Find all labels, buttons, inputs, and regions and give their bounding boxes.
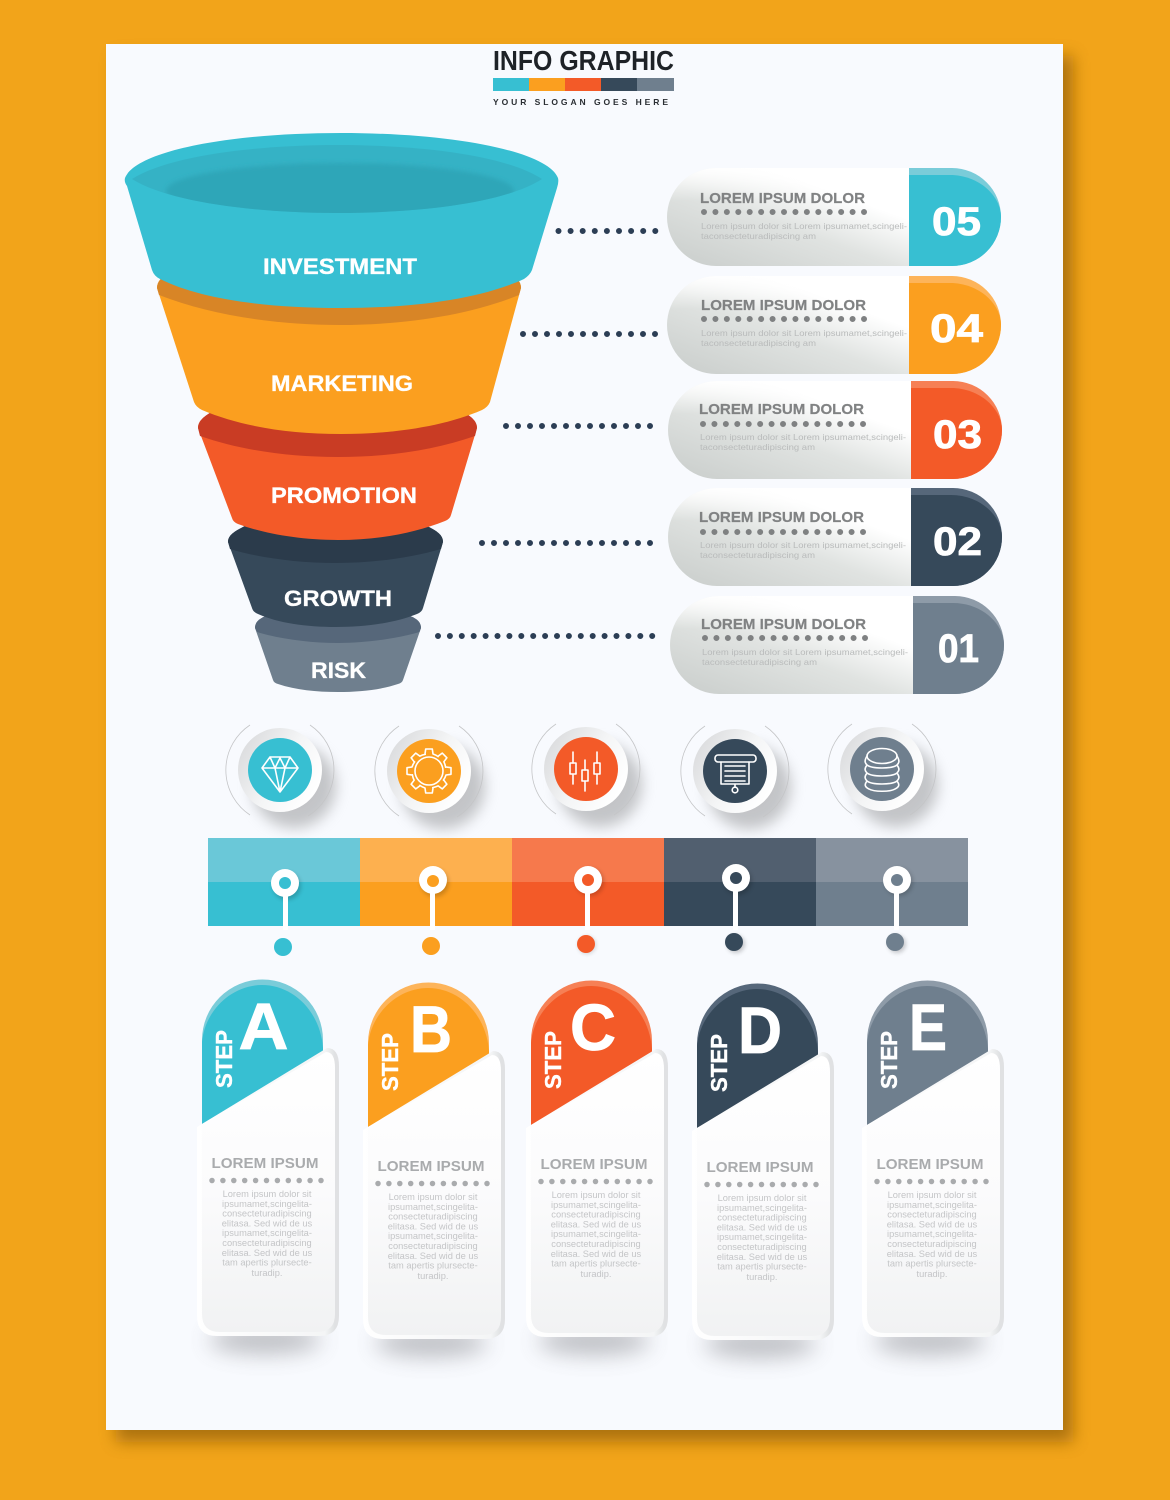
funnel tier: marketing [157,272,521,434]
pill 04 [667,276,1001,374]
step card D: STEP [706,1034,732,1092]
dotted connector 02 [482,540,651,546]
band segment B [360,838,512,926]
icon button: projector screen [681,726,791,829]
funnel tier: promotion [198,410,477,540]
funnel opening [132,145,542,219]
page sheet shadow [116,56,1073,1442]
dotted connector 05 [558,228,656,234]
step card B: tam apertis plursecte- [388,1260,478,1270]
step card C: ipsumamet,scingelita- [551,1229,641,1239]
colour strip [493,78,674,91]
step card C: elitasa. Sed wid de us [551,1249,642,1259]
dotted connector 01 [438,633,654,639]
step card E: tam apertis plursecte- [887,1258,977,1268]
pill 02: LOREM IPSUM DOLOR [699,509,864,526]
pill 01: 01 [938,627,979,671]
step card A: A [238,989,288,1063]
step card D: elitasa. Sed wid de us [717,1252,808,1262]
step card E: E [909,990,947,1064]
step card E: LOREM IPSUM [876,1156,984,1173]
band segment A [208,838,360,926]
pill 02: taconsecteturadipiscing am [700,550,815,560]
step card A: LOREM IPSUM [212,1155,318,1172]
step card E: ipsumamet,scingelita- [887,1200,977,1210]
dotted connector 03 [506,423,651,429]
step card A: consecteturadipiscing [222,1238,312,1248]
icon button: gear [375,726,485,829]
pin C [574,866,604,954]
pill 03: taconsecteturadipiscing am [700,442,815,452]
step card B: elitasa. Sed wid de us [388,1222,479,1232]
step card D [692,984,834,1358]
step card E: Lorem ipsum dolor sit [888,1190,977,1200]
funnel chart [125,133,558,692]
step card C: tam apertis plursecte- [551,1258,641,1268]
step card B: elitasa. Sed wid de us [388,1251,479,1261]
band segment E [816,838,968,926]
funnel tier: growth [228,526,443,627]
dotted connector 04 [523,331,657,337]
step card E [862,980,1004,1355]
step card C: consecteturadipiscing [551,1210,641,1220]
icon button: sliders [532,724,642,827]
step card A [197,980,339,1354]
step card B: STEP [377,1033,403,1091]
step card A: turadip. [251,1268,283,1278]
funnel tier: investment [125,133,558,308]
pill 02: Lorem ipsum dolor sit Lorem ipsumamet,scingeli- [700,540,906,550]
pill 04: LOREM IPSUM DOLOR [701,297,866,314]
funnel tier: risk [255,616,421,692]
step card E: elitasa. Sed wid de us [887,1249,978,1259]
step card A: elitasa. Sed wid de us [222,1218,313,1228]
step card E: elitasa. Sed wid de us [887,1220,978,1230]
step card A: Lorem ipsum dolor sit [223,1189,312,1199]
pin B [419,866,449,955]
pill 04: 04 [930,307,984,351]
step card A: elitasa. Sed wid de us [222,1248,313,1258]
step card D: consecteturadipiscing [717,1212,807,1222]
step card A: tam apertis plursecte- [222,1258,312,1268]
timeline band [208,838,968,926]
step card C: turadip. [580,1269,612,1279]
pill 03: LOREM IPSUM DOLOR [699,401,864,418]
step card B: consecteturadipiscing [388,1212,478,1222]
step card D: D [738,993,782,1067]
pill 02 [668,488,1002,586]
step card E: consecteturadipiscing [887,1239,977,1249]
step card D: consecteturadipiscing [717,1242,807,1252]
step card B: LOREM IPSUM [378,1158,484,1175]
step card D: ipsumamet,scingelita- [717,1232,807,1242]
band segment C [512,838,664,926]
white page sheet [106,44,1063,1430]
pill 05 [667,168,1001,266]
pill 04: Lorem ipsum dolor sit Lorem ipsumamet,scingeli- [701,328,907,338]
pill 03: 03 [933,413,982,457]
step card C: STEP [540,1031,566,1089]
step card D: turadip. [746,1272,778,1282]
step card E: STEP [876,1031,902,1089]
step card C: Lorem ipsum dolor sit [552,1190,641,1200]
step card D: tam apertis plursecte- [717,1262,807,1272]
pin D [722,864,752,953]
step card C [526,980,668,1355]
pin A [271,869,301,956]
step card E: turadip. [916,1269,948,1279]
step card A: STEP [211,1030,237,1088]
pill 03 [668,381,1002,479]
funnel tier: risk: RISK [311,658,366,683]
icon button: database coins [828,724,938,827]
step card E: ipsumamet,scingelita- [887,1229,977,1239]
step card D: ipsumamet,scingelita- [717,1203,807,1213]
funnel tier: investment: INVESTMENT [263,254,418,279]
step card E: consecteturadipiscing [887,1210,977,1220]
title: INFO GRAPHIC [493,45,674,76]
pill 05: Lorem ipsum dolor sit Lorem ipsumamet,scingeli- [701,221,907,231]
slogan: YOUR SLOGAN GOES HERE [493,97,668,107]
pill 05: taconsecteturadipiscing am [701,231,816,241]
pill 03: Lorem ipsum dolor sit Lorem ipsumamet,scingeli- [700,432,906,442]
step card C: ipsumamet,scingelita- [551,1200,641,1210]
title block [493,45,674,107]
step card A: ipsumamet,scingelita- [222,1228,312,1238]
step card B: ipsumamet,scingelita- [388,1202,478,1212]
pill 05: 05 [932,200,981,244]
step card B: B [410,992,452,1066]
step card D: elitasa. Sed wid de us [717,1222,808,1232]
pill 01 [670,596,1004,694]
step card A: consecteturadipiscing [222,1208,312,1218]
pill 04: taconsecteturadipiscing am [701,338,816,348]
pill 01: LOREM IPSUM DOLOR [701,616,866,633]
pin E [883,866,913,953]
step card B: Lorem ipsum dolor sit [389,1192,478,1202]
step card C: consecteturadipiscing [551,1239,641,1249]
pill 05: LOREM IPSUM DOLOR [700,190,865,207]
pill 02: 02 [933,520,982,564]
pill 01: Lorem ipsum dolor sit Lorem ipsumamet,scingeli- [702,647,908,657]
step card D: Lorem ipsum dolor sit [718,1193,807,1203]
icon button: diamond [226,725,336,828]
band segment D [664,838,816,926]
step card D: LOREM IPSUM [706,1159,814,1176]
step card C: C [570,990,616,1064]
step card A: ipsumamet,scingelita- [222,1199,312,1209]
step card B: turadip. [417,1271,449,1281]
pill 01: taconsecteturadipiscing am [702,657,817,667]
step card B: ipsumamet,scingelita- [388,1231,478,1241]
step card C: elitasa. Sed wid de us [551,1220,642,1230]
funnel tier: promotion: PROMOTION [271,483,417,508]
funnel tier: growth: GROWTH [284,586,392,611]
step card B: consecteturadipiscing [388,1241,478,1251]
step card B [363,982,505,1357]
step card C: LOREM IPSUM [540,1156,648,1173]
funnel tier: marketing: MARKETING [271,371,413,396]
